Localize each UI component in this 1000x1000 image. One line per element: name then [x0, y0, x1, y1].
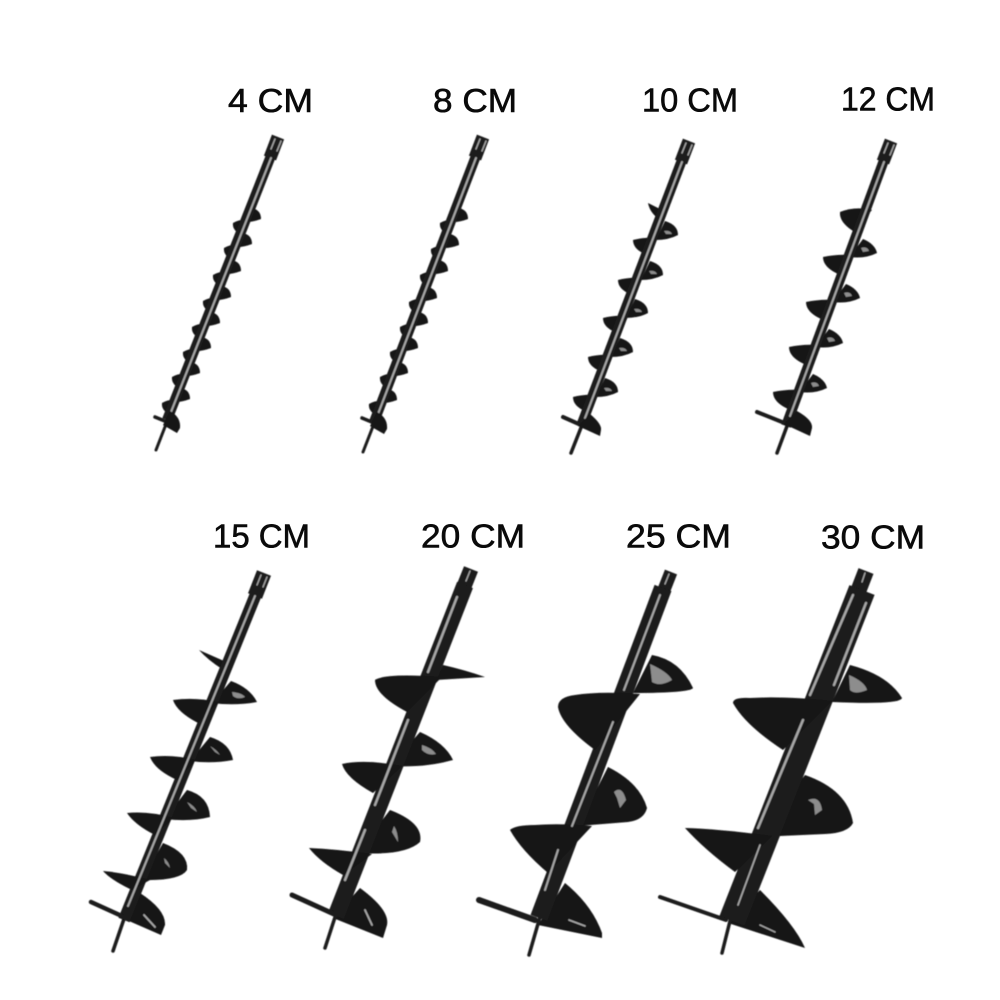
- label: 30 CM: 30 CM: [821, 518, 925, 556]
- label: 15 CM: 15 CM: [213, 518, 310, 554]
- label: 25 CM: 25 CM: [626, 518, 731, 554]
- label: 8 CM: 8 CM: [433, 82, 517, 119]
- auger: 8 cm: [362, 137, 486, 452]
- auger: 4 cm: [155, 137, 281, 450]
- label: 12 CM: 12 CM: [841, 80, 935, 118]
- auger: 20 cm: [292, 569, 485, 948]
- auger: 12 cm: [757, 141, 894, 453]
- label: 20 CM: 20 CM: [421, 518, 525, 554]
- auger: 25 cm: [479, 572, 693, 955]
- auger: 10 cm: [563, 141, 692, 453]
- auger: 15 cm: [91, 573, 267, 951]
- label: 10 CM: 10 CM: [642, 82, 738, 118]
- label: 4 CM: 4 CM: [228, 82, 313, 119]
- auger: 30 cm: [660, 571, 902, 953]
